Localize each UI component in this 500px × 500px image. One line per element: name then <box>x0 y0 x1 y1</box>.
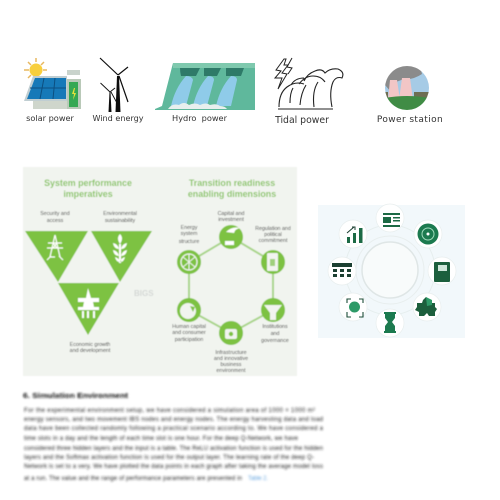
captions: enabling dimensions: Regulation and <box>255 226 291 232</box>
triangle: security and access <box>25 231 88 282</box>
icon: pylon <box>47 235 63 260</box>
node: document <box>376 204 404 232</box>
heading: system performance imperatives: System performance <box>44 178 132 188</box>
heading: 6. Simulation Environment <box>23 393 129 400</box>
heading: transition readiness: Transition readiness <box>189 178 275 188</box>
watermark: BIGS <box>134 289 154 298</box>
label: power station: Power station <box>377 115 443 125</box>
paragraph: time slots in a day and the length of each time slot is one hour. For the deep Q-Network, we have <box>24 436 299 442</box>
captions: enabling dimensions: Human capital <box>172 324 206 330</box>
node: bar chart <box>339 220 367 248</box>
paragraph: Table 2. <box>248 476 268 482</box>
node: calendar <box>328 257 356 285</box>
label: solar power: solar power <box>26 113 75 123</box>
captions: enabling dimensions: governance <box>261 338 289 344</box>
captions: enabling dimensions: and consumer <box>172 330 206 336</box>
triangle: economic growth <box>58 283 119 335</box>
panel: energy transition framework <box>23 167 297 376</box>
captions: enabling dimensions: Energy <box>181 225 198 231</box>
node: energy system structure <box>177 250 201 274</box>
captions: enabling dimensions: and <box>271 331 279 337</box>
node: capital and investment <box>219 225 243 249</box>
captions: enabling dimensions: participation <box>175 337 203 343</box>
captions: enabling dimensions: Institutions <box>262 324 288 330</box>
heading: system performance imperatives: imperatives <box>63 189 113 199</box>
captions: system imperatives: Economic growth <box>70 342 110 348</box>
icon: tidal waves and lightning <box>275 58 343 109</box>
triangle: environmental sustainability <box>91 231 152 282</box>
icon: hydro dam <box>155 63 255 110</box>
captions: enabling dimensions: business <box>221 362 242 368</box>
paragraph: For the experimental environment setup, we have considered a simulation area of 1000 × 1000 m² <box>24 408 315 414</box>
panel: circular icon ring <box>318 204 465 338</box>
captions: enabling dimensions: system <box>181 231 198 237</box>
icon: wind turbines <box>100 58 128 112</box>
paragraph: considered three hidden layers and the input is a table. The ReLU activation function is used for the hidden <box>24 446 323 452</box>
node: regulation <box>261 250 285 274</box>
captions: enabling dimensions: and innovative <box>214 356 248 362</box>
captions: system imperatives: sustainability <box>105 218 136 224</box>
captions: enabling dimensions: structure <box>179 239 199 245</box>
captions: enabling dimensions: Capital and <box>218 211 244 217</box>
captions: enabling dimensions: Infrastructure <box>215 350 247 356</box>
icon: wheat <box>113 234 127 263</box>
label: wind energy: Wind energy <box>92 113 144 123</box>
heading: transition readiness: enabling dimensions <box>188 189 276 199</box>
node: gauge <box>414 220 442 248</box>
hexagon connectors <box>189 237 273 333</box>
label: hydro power: Hydro power <box>172 113 228 123</box>
paragraph: energy sensors, and two movement IBS nodes and energy nodes. The energy harvesting data and load <box>24 417 323 423</box>
label: tidal power: Tidal power <box>274 115 329 126</box>
node: infrastructure <box>219 321 243 345</box>
captions: enabling dimensions: environment <box>216 368 246 374</box>
captions: enabling dimensions: commitment <box>259 238 288 244</box>
paragraph: data have been collected randomly following a practical scenario according to. We have considered a <box>24 426 324 432</box>
node: puzzle <box>413 293 441 321</box>
captions: system imperatives: Security and <box>40 211 70 217</box>
blurred text block: simulation environment <box>23 393 324 482</box>
paragraph: layers and the Softmax activation function is used for the output layer. The learning rate of the deep Q- <box>24 455 314 461</box>
icon: power station <box>385 64 429 110</box>
icon: factory <box>78 288 99 318</box>
captions: system imperatives: access <box>47 218 64 224</box>
icon: solar power <box>24 58 81 109</box>
captions: enabling dimensions: political <box>264 232 282 238</box>
node: target <box>339 293 367 321</box>
node: human capital <box>177 298 201 322</box>
paragraph: Network is set to a very. We have plotted the data points in each graph after taking the average model loss <box>24 464 323 470</box>
paragraph: at a run. The value and the range of performance parameters are presented in <box>24 476 242 482</box>
node: hourglass <box>376 309 404 337</box>
paragraph <box>24 408 324 482</box>
node: institutions <box>261 298 285 322</box>
node: notebook <box>428 257 456 285</box>
captions: enabling dimensions: investment <box>218 217 244 223</box>
captions: system imperatives: Environmental <box>103 211 137 217</box>
captions: system imperatives: and development <box>70 348 111 354</box>
